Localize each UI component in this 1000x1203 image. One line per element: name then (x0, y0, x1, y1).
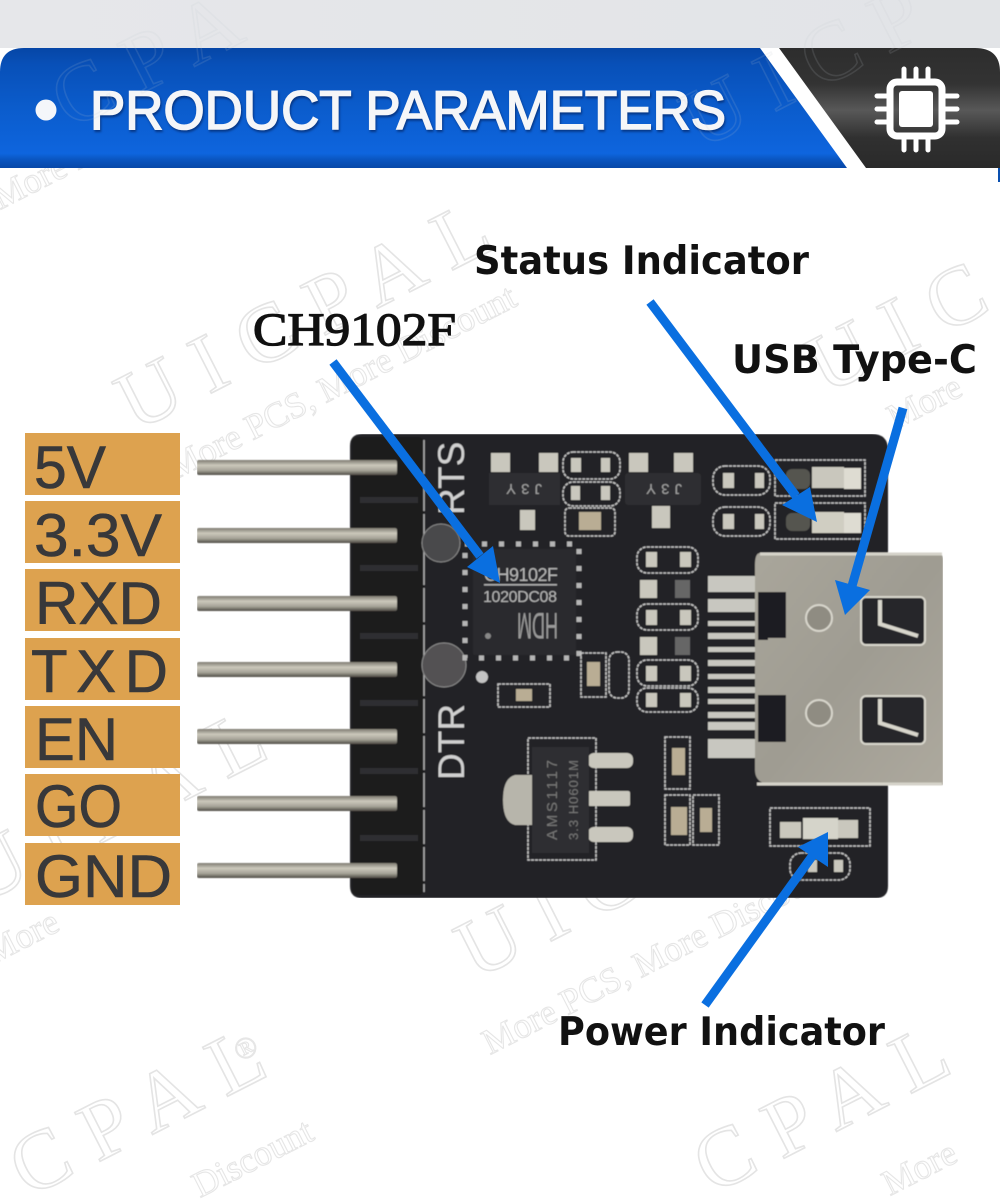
status LEDs (775, 460, 865, 539)
callout: USB Type-C: USB Type-C (732, 338, 977, 383)
top light band (0, 0, 1000, 48)
watermarks: UICPAL (101, 172, 525, 449)
pin label: RXD: RXD (35, 570, 162, 637)
voltage regulator AMS1117 (503, 738, 633, 860)
watermark over header (36, 0, 958, 167)
pin label: EN (25, 706, 180, 773)
voltage regulator AMS1117: 3.3 H0601M (566, 760, 581, 840)
main chip (465, 544, 579, 658)
pin label: 3.3V: 3.3V (34, 502, 162, 569)
pin label: GND: GND (35, 843, 172, 910)
pin label: GO: GO (35, 773, 122, 840)
header strip (352, 437, 424, 895)
lower capacitors (665, 737, 719, 845)
main chip: HDM (517, 605, 558, 646)
power LED (770, 808, 870, 880)
silkscreen DTR: DTR (431, 704, 472, 780)
pin label: TXD: TXD (31, 638, 168, 705)
watermarks: More (880, 366, 968, 437)
watermarks: UICPAL (441, 720, 865, 997)
small passive components (498, 452, 770, 712)
transistors J3Y (489, 453, 701, 530)
transistors J3Y: J3Y (646, 480, 682, 497)
callout: Status Indicator: Status Indicator (474, 239, 810, 284)
arrow: USB Type-C (835, 408, 903, 615)
watermarks: ® (228, 1028, 263, 1068)
watermarks: Discount (185, 1110, 319, 1203)
arrow: status indicator (650, 302, 817, 522)
vias (422, 524, 488, 687)
callout: CH9102F: CH9102F (253, 304, 456, 356)
voltage regulator AMS1117: AMS1117 (544, 760, 561, 840)
arrow: power indicator (705, 832, 828, 1005)
circuit board photo (197, 434, 943, 898)
arrow: CH9102F (333, 362, 500, 583)
header banner (0, 48, 1000, 168)
banner: blue title bar (0, 48, 847, 168)
title: PRODUCT PARAMETERS (90, 79, 726, 141)
watermarks: More PCS, More Discount (160, 276, 523, 487)
icon: chip (877, 69, 957, 150)
banner: dark icon tab (779, 48, 1000, 168)
watermarks: More (875, 1132, 963, 1203)
right edge accent (998, 168, 1000, 182)
pin label: EN: EN (35, 706, 118, 773)
connector contact pads (708, 576, 756, 758)
main chip: CH9102F (484, 565, 558, 585)
USB Type-C connector (755, 553, 943, 785)
bullet (36, 100, 56, 120)
silkscreen RTS: RTS (431, 442, 472, 515)
pin labels (25, 433, 180, 910)
pin label: 5V (25, 433, 180, 501)
pin label: 5V: 5V (34, 434, 106, 501)
callout: Power Indicator: Power Indicator (558, 1010, 886, 1055)
main chip: 1020DC08 (483, 589, 557, 606)
watermarks: More PCS, More Discount (475, 851, 838, 1062)
board (350, 434, 888, 898)
transistors J3Y: J3Y (506, 480, 542, 497)
header pins (197, 460, 397, 878)
pin label: GO (25, 773, 180, 840)
